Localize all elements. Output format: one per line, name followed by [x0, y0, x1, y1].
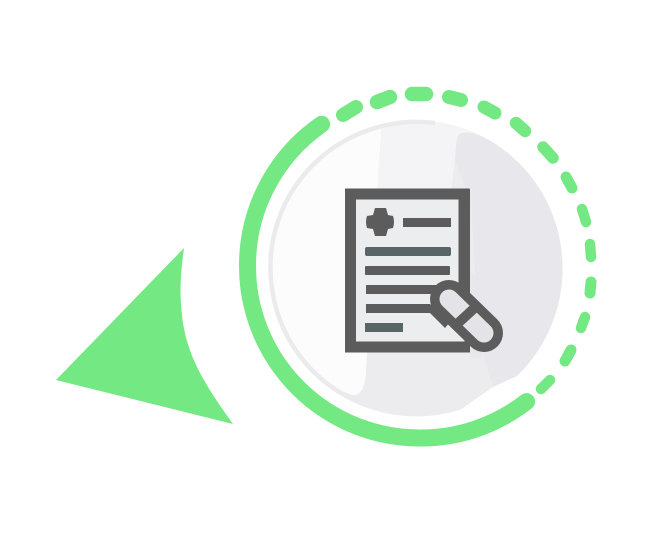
- text lines: [365, 218, 451, 332]
- disc rim highlight: [270, 122, 435, 405]
- pill capsule: [449, 299, 484, 333]
- progress ring: [247, 94, 591, 438]
- document page: [350, 194, 470, 347]
- solid arc: [247, 124, 527, 438]
- page corner cut: [459, 199, 510, 358]
- pointer triangle: [56, 248, 233, 424]
- dashed arc: [343, 94, 591, 389]
- cross symbol: [366, 208, 394, 236]
- disc middle panel: [378, 122, 476, 188]
- infographic: medical record badge: [56, 86, 596, 446]
- disc light left panel: [272, 128, 382, 395]
- icon: prescription document with pill: [345, 189, 510, 358]
- inner disc: [268, 120, 562, 416]
- disc dark right panel: [455, 133, 575, 420]
- disc bottom lower shade: [462, 376, 516, 409]
